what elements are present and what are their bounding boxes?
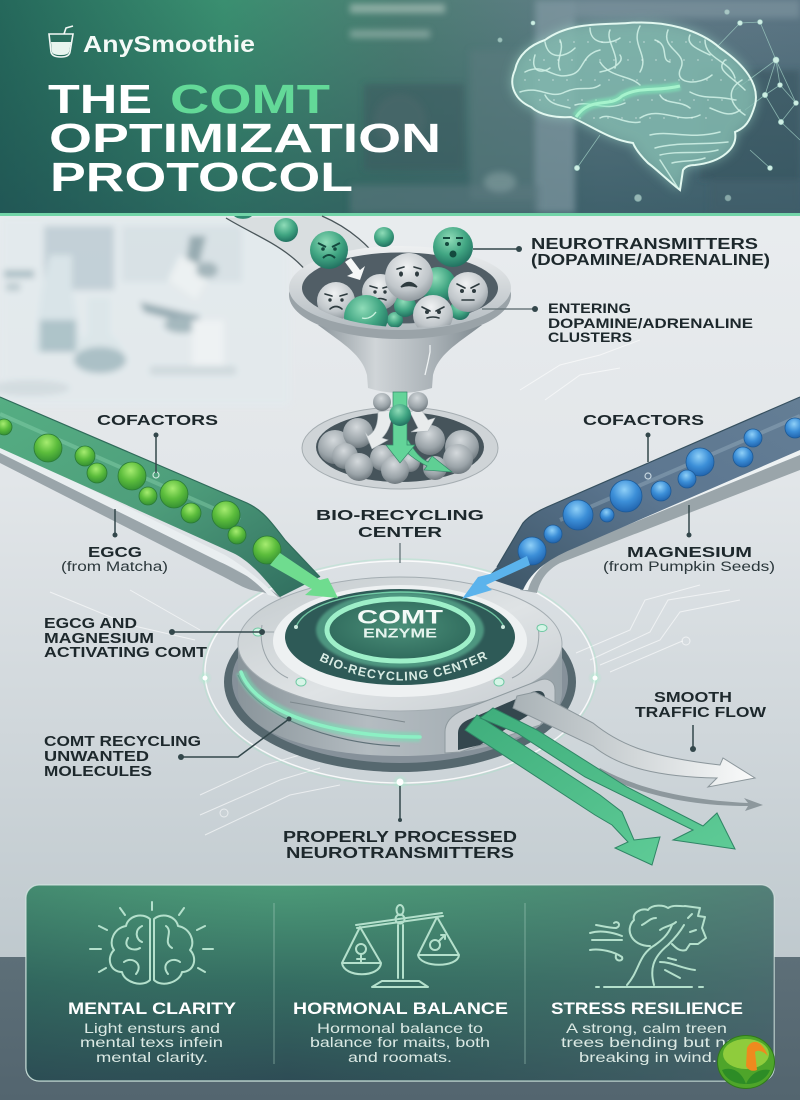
label: COMT recycling unwanted molecules: COMT RECYCLING xyxy=(44,734,201,750)
arrow: green centre xyxy=(386,392,415,463)
benefit: hormonal balance xyxy=(293,905,508,1065)
icon: tree in wind xyxy=(590,906,706,987)
left pipe: EGCG cofactors xyxy=(0,397,338,598)
label: bio-recycling center xyxy=(316,507,484,563)
label: COMT recycling unwanted molecules xyxy=(44,716,292,780)
arrow: green upper xyxy=(480,708,735,849)
label: right cofactors xyxy=(583,412,704,462)
face ball large xyxy=(385,253,433,301)
falling green molecules xyxy=(234,216,473,269)
benefit: mental clarity: mental texs infein xyxy=(80,1034,223,1050)
label: magnesium from pumpkin seeds xyxy=(603,505,775,574)
label: right cofactors: COFACTORS xyxy=(583,412,704,429)
arrow: white xyxy=(513,692,755,787)
benefit: hormonal balance: and roomats. xyxy=(348,1049,452,1065)
logo: AnySmoothie: AnySmoothie xyxy=(83,31,255,57)
green cofactor molecules xyxy=(0,419,281,564)
surprised face xyxy=(433,227,473,267)
face ball xyxy=(448,272,488,312)
benefit: hormonal balance: HORMONAL BALANCE xyxy=(293,1000,508,1018)
glow strip xyxy=(241,672,420,737)
leader and label: neurotransmitters: NEUROTRANSMITTERS xyxy=(531,236,758,253)
face ball xyxy=(317,282,355,320)
label: smooth traffic flow xyxy=(635,690,766,752)
title: COMT xyxy=(170,76,330,122)
label: smooth traffic flow: TRAFFIC FLOW xyxy=(635,705,766,721)
label: COMT recycling unwanted molecules: UNWANTED xyxy=(44,749,149,765)
icon: glowing brain xyxy=(512,22,756,190)
label: magnesium from pumpkin seeds: (from Pumpkin Seeds) xyxy=(603,559,775,574)
leader and label: entering clusters xyxy=(482,300,753,345)
logo: AnySmoothie xyxy=(49,26,255,57)
label: EGCG and magnesium activating COMT: EGCG AND xyxy=(44,616,137,632)
benefit: stress resilience xyxy=(551,906,743,1065)
arrow: blue into enzyme xyxy=(462,556,530,599)
output arrows xyxy=(465,692,763,865)
label: properly processed neurotransmitters xyxy=(283,786,517,862)
blurred lab in header xyxy=(350,0,800,213)
device: COMT enzyme bio-recycling center: ENZYME xyxy=(363,626,437,640)
outlet opening xyxy=(445,679,555,753)
arrow: green curved xyxy=(400,440,452,472)
drain basin with grey molecules xyxy=(302,407,498,489)
arrow: green lower xyxy=(465,715,660,865)
right pipe: magnesium cofactors xyxy=(462,397,800,599)
body side xyxy=(238,644,562,756)
label: magnesium from pumpkin seeds: MAGNESIUM xyxy=(627,544,752,561)
benefit: stress resilience: A strong, calm treen xyxy=(566,1020,727,1036)
header divider xyxy=(0,213,800,216)
entry chutes into funnel xyxy=(226,216,381,295)
funnel output arrows xyxy=(364,392,452,472)
label: left cofactors xyxy=(97,412,218,473)
pipe channel xyxy=(0,397,320,597)
benefit: stress resilience: STRESS RESILIENCE xyxy=(551,1000,743,1018)
cofactor marker xyxy=(153,472,159,478)
label: left cofactors: COFACTORS xyxy=(97,412,218,429)
pipe channel xyxy=(487,397,800,590)
icon: balance scale xyxy=(342,905,459,987)
label: bio-recycling center: BIO-RECYCLING xyxy=(316,507,484,524)
benefit: mental clarity xyxy=(68,902,236,1065)
label: EGCG and magnesium activating COMT: ACTIVATING COMT xyxy=(44,645,207,661)
top plate xyxy=(238,577,562,711)
title: OPTIMIZATION xyxy=(49,115,441,161)
pipe lip xyxy=(0,445,282,598)
label: bio-recycling center: CENTER xyxy=(358,524,442,541)
label: properly processed neurotransmitters: NEUROTRANSMITTERS xyxy=(286,845,514,862)
glowing inner ring xyxy=(316,592,484,668)
indicator lights xyxy=(253,624,547,686)
blue cofactor molecules xyxy=(518,418,800,565)
funnel with neurotransmitter molecules xyxy=(234,216,511,393)
base ring xyxy=(224,592,576,772)
benefit: stress resilience: trees bending but not xyxy=(561,1034,742,1050)
label: EGCG and magnesium activating COMT: MAGNESIUM xyxy=(44,631,154,647)
benefit: mental clarity: Light ensturs and xyxy=(84,1020,220,1036)
arrow: white right xyxy=(410,408,435,432)
leader and label: entering clusters: DOPAMINE/ADRENALINE xyxy=(548,315,753,331)
benefit: stress resilience: breaking in wind. xyxy=(579,1049,717,1065)
benefit: mental clarity: MENTAL CLARITY xyxy=(68,1000,236,1018)
header banner xyxy=(0,0,800,213)
face ball xyxy=(362,274,398,310)
arrow: green into enzyme xyxy=(270,553,338,598)
label: smooth traffic flow: SMOOTH xyxy=(654,690,732,706)
arrow: thin grey xyxy=(596,768,763,811)
benefit: hormonal balance: balance for maits, both xyxy=(310,1034,490,1050)
title xyxy=(48,76,441,200)
funnel cone xyxy=(318,325,482,393)
outer glow ring xyxy=(203,559,597,785)
curved ring text: BIO-RECYCLING CENTER xyxy=(320,652,488,680)
benefit: hormonal balance: Hormonal balance to xyxy=(317,1020,483,1036)
circuit traces xyxy=(50,340,740,835)
molecules in funnel xyxy=(317,253,488,328)
face ball xyxy=(413,295,453,328)
label: COMT recycling unwanted molecules: MOLECULES xyxy=(44,764,152,780)
label: EGCG from Matcha xyxy=(61,509,168,574)
panel: benefits xyxy=(26,885,774,1081)
leader and label: neurotransmitters: (DOPAMINE/ADRENALINE) xyxy=(531,252,770,269)
leader and label: neurotransmitters xyxy=(473,236,770,269)
enzyme text: COMT xyxy=(357,608,444,628)
icon: smoothie cup xyxy=(49,26,73,57)
icon: brain with rays xyxy=(90,902,213,984)
cofactor marker xyxy=(645,473,651,479)
label: EGCG from Matcha: (from Matcha) xyxy=(61,559,168,574)
logo badge xyxy=(718,1036,774,1088)
benefit: mental clarity: mental clarity. xyxy=(96,1049,208,1065)
label: EGCG from Matcha: EGCG xyxy=(88,544,142,561)
title: THE xyxy=(48,76,152,122)
angry face xyxy=(310,231,348,269)
blurred laboratory backdrop xyxy=(0,216,290,406)
funnel rim xyxy=(289,251,511,339)
leader and label: entering clusters: CLUSTERS xyxy=(548,329,632,345)
arrow: white into funnel xyxy=(345,258,365,280)
leader and label: entering clusters: ENTERING xyxy=(548,300,631,316)
dark disc xyxy=(285,589,515,685)
label: properly processed neurotransmitters: PROPERLY PROCESSED xyxy=(283,829,517,846)
icon: network nodes xyxy=(498,10,800,201)
title: PROTOCOL xyxy=(50,154,353,200)
pipe lip xyxy=(520,448,800,593)
device: COMT enzyme bio-recycling center xyxy=(224,576,576,772)
label: EGCG and magnesium activating COMT xyxy=(44,616,265,661)
ring glow dots xyxy=(198,671,602,790)
arrow: white left xyxy=(364,410,392,449)
